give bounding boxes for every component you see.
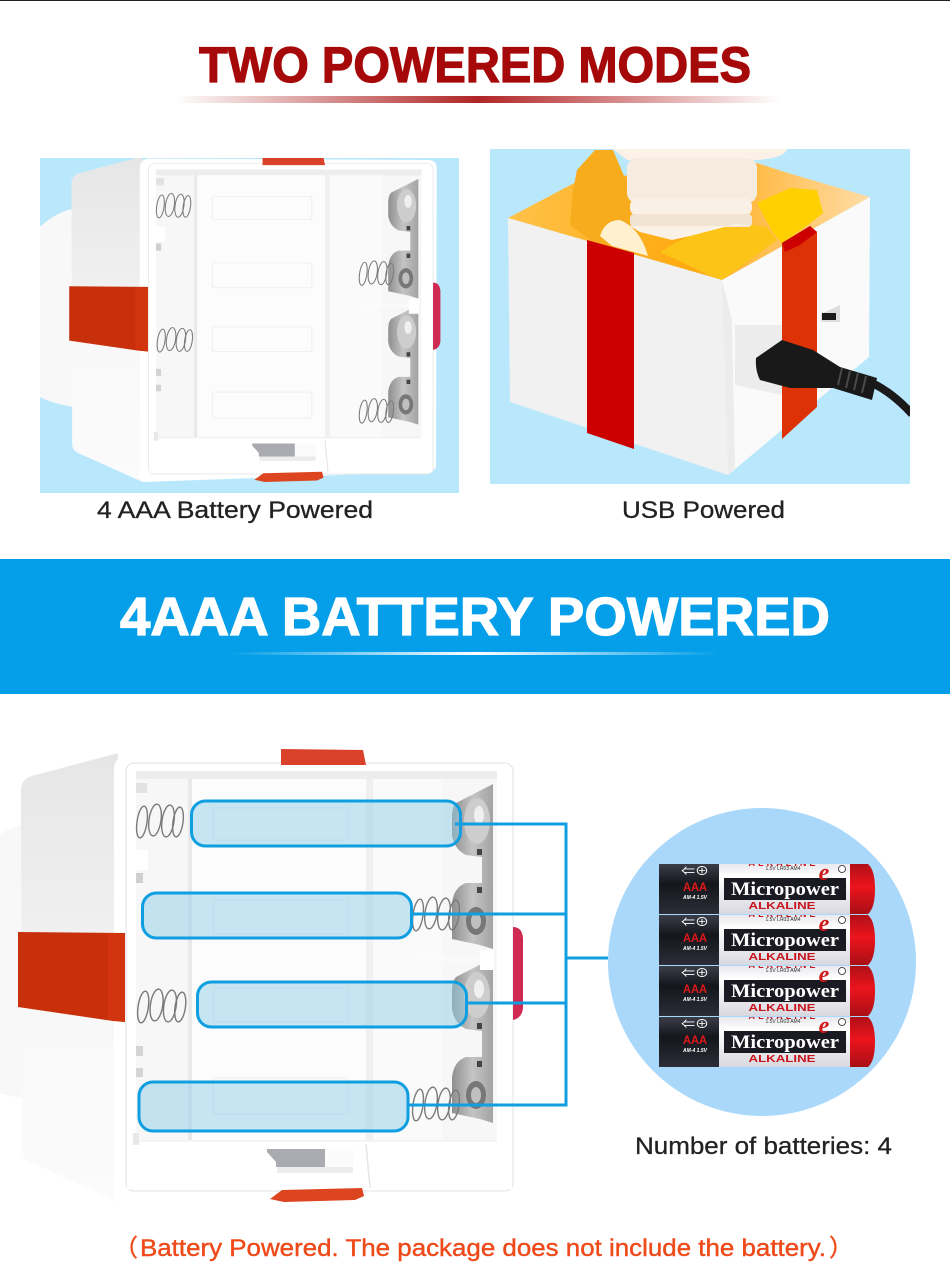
red ribbon left bbox=[587, 240, 634, 449]
battery 1: ⇐⊕ bbox=[681, 864, 709, 878]
battery 2: ⇐⊕ bbox=[681, 915, 709, 929]
battery 2: ALKALINE bbox=[748, 909, 816, 919]
battery 2: ALKALINE bbox=[748, 952, 816, 963]
note: battery not included: （ bbox=[114, 1235, 138, 1262]
illustration: open battery box bbox=[40, 154, 440, 482]
illustration: large battery compartment bbox=[0, 749, 523, 1202]
battery slot highlights bbox=[139, 801, 466, 1131]
battery 4 bbox=[659, 1017, 875, 1067]
battery 4: 1.5V LR03 AM4 bbox=[765, 1019, 801, 1025]
battery 1: ALKALINE bbox=[748, 901, 816, 912]
banner heading: 4AAA BATTERY POWERED bbox=[120, 587, 830, 647]
white lamp column bbox=[613, 149, 787, 240]
battery 4: e bbox=[819, 1013, 830, 1039]
battery 1: Micropower bbox=[731, 879, 840, 900]
note: battery not included: Battery Powered. The package does not include the battery. bbox=[140, 1235, 826, 1262]
usb shadow bbox=[735, 325, 782, 395]
usb plug bbox=[756, 340, 877, 400]
red ribbon right bbox=[782, 226, 817, 439]
battery 1: AAA bbox=[683, 880, 707, 894]
battery 4: ⇐⊕ bbox=[681, 1017, 709, 1031]
caption: usb: USB Powered bbox=[622, 497, 785, 524]
battery 2: 1.5V LR03 AM4 bbox=[765, 917, 801, 923]
battery 4: ALKALINE bbox=[748, 1011, 816, 1021]
battery 4: AAA bbox=[683, 1033, 707, 1047]
battery 2 bbox=[659, 915, 875, 965]
battery 1: AM-4 1.5V bbox=[682, 895, 708, 901]
note: battery not included: ） bbox=[829, 1235, 853, 1262]
battery 2: e bbox=[819, 911, 830, 937]
battery 2: Micropower bbox=[731, 930, 840, 951]
caption: battery: 4 AAA Battery Powered bbox=[97, 497, 373, 524]
banner: 4aaa battery powered bbox=[0, 559, 950, 694]
title: two powered modes: TWO POWERED MODES bbox=[199, 37, 751, 93]
battery 3: ALKALINE bbox=[748, 960, 816, 970]
panel: usb powered photo bbox=[490, 149, 912, 484]
battery 2: AAA bbox=[683, 931, 707, 945]
battery 4: AM-4 1.5V bbox=[682, 1048, 708, 1054]
illustration: box interior bbox=[508, 163, 870, 280]
battery 1: e bbox=[819, 860, 830, 886]
battery 3: Micropower bbox=[731, 981, 840, 1002]
battery 2: AM-4 1.5V bbox=[682, 946, 708, 952]
battery 3: 1.5V LR03 AM4 bbox=[765, 968, 801, 974]
battery 1: 1.5V LR03 AM4 bbox=[765, 866, 801, 872]
battery 1 bbox=[659, 864, 875, 914]
battery 3 bbox=[659, 966, 875, 1016]
battery 3: ALKALINE bbox=[748, 1003, 816, 1014]
front left face bbox=[508, 218, 728, 475]
battery 3: e bbox=[819, 962, 830, 988]
battery 3: AM-4 1.5V bbox=[682, 997, 708, 1003]
amber crystals bbox=[570, 150, 823, 280]
battery 4: Micropower bbox=[731, 1032, 840, 1053]
panel: battery powered photo bbox=[40, 154, 459, 493]
battery 3: AAA bbox=[683, 982, 707, 996]
connector lines bbox=[407, 824, 608, 1105]
battery 3: ⇐⊕ bbox=[681, 966, 709, 980]
battery 1: ALKALINE bbox=[748, 858, 816, 868]
usb cable bbox=[870, 382, 912, 414]
front right face bbox=[722, 197, 870, 475]
circle: batteries background bbox=[608, 808, 916, 1116]
battery 4: ALKALINE bbox=[748, 1054, 816, 1065]
switch slot bbox=[821, 305, 840, 322]
caption: number of batteries: Number of batteries: 4 bbox=[635, 1133, 892, 1160]
